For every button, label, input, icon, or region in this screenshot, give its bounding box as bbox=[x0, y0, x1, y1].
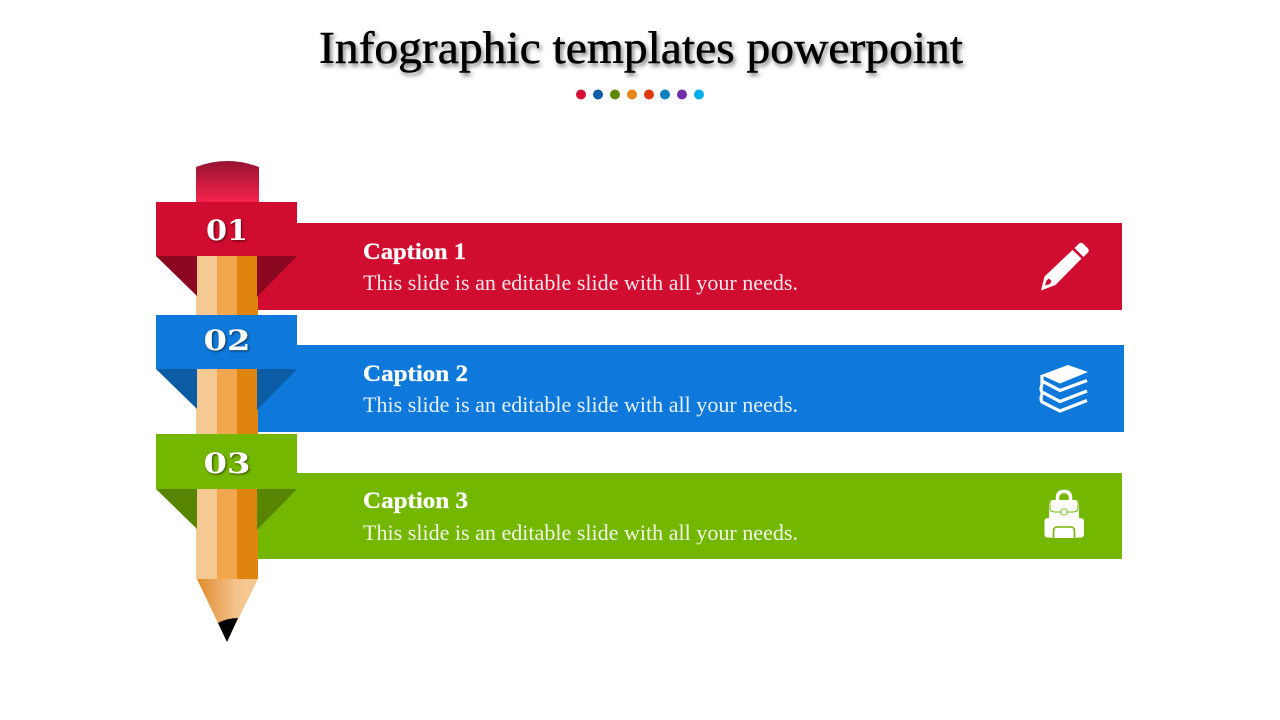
number 02: 02 bbox=[204, 324, 250, 357]
caption 2 heading: Caption 2 bbox=[363, 361, 468, 386]
pencil illustration bbox=[196, 161, 259, 642]
title: Infographic templates powerpoint bbox=[319, 23, 964, 73]
caption 3 body: This slide is an editable slide with all your needs. bbox=[363, 520, 798, 545]
caption 2 body: This slide is an editable slide with all your needs. bbox=[363, 392, 798, 417]
pencil eraser bbox=[196, 161, 259, 202]
decorative dots row bbox=[576, 90, 704, 100]
banner 01 bbox=[156, 202, 297, 297]
pencil body stripes bbox=[196, 250, 258, 579]
panel: caption bar 1 bbox=[257, 223, 1122, 310]
panel: caption bar 2 bbox=[257, 345, 1124, 432]
caption 3 heading: Caption 3 bbox=[363, 488, 468, 513]
number 03: 03 bbox=[204, 447, 250, 480]
caption 1 heading: Caption 1 bbox=[363, 239, 466, 264]
pencil tip bbox=[197, 579, 258, 642]
banner 02 bbox=[156, 315, 297, 410]
pencil lead bbox=[218, 618, 238, 642]
icon: backpack bbox=[1044, 492, 1084, 538]
panel: caption bar 3 bbox=[257, 473, 1122, 559]
icon: books bbox=[1041, 365, 1088, 411]
icon: pencil bbox=[1041, 243, 1089, 290]
number 01: 01 bbox=[206, 214, 248, 247]
caption 1 body: This slide is an editable slide with all your needs. bbox=[363, 270, 798, 295]
banner 03 bbox=[156, 434, 297, 530]
